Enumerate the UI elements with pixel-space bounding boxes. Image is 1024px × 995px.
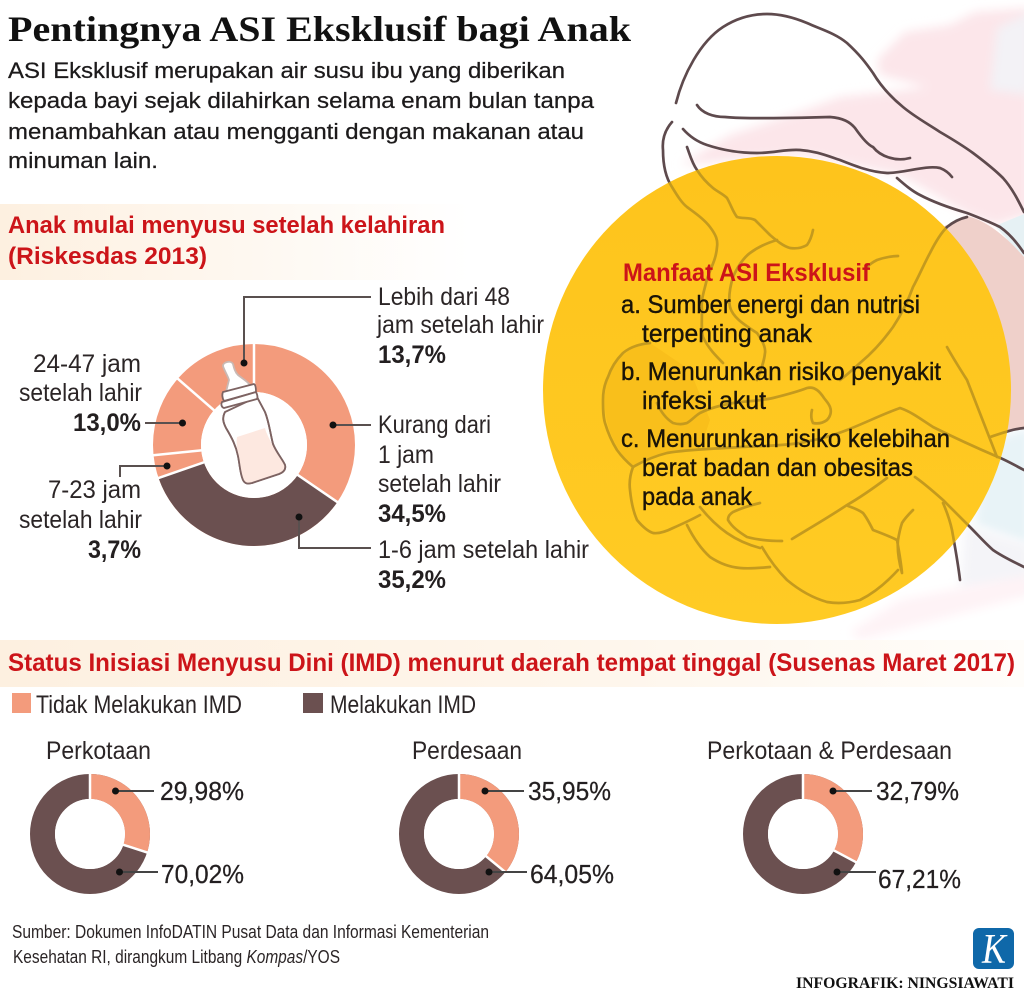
- intro paragraph: menambahkan atau mengganti dengan makanan atau: [8, 119, 584, 144]
- donut: Perkotaan: 70,02%: [161, 861, 244, 889]
- donut: Perkotaan & Perdesaan: Perkotaan & Perdesaan: [707, 737, 952, 765]
- intro paragraph: minuman lain.: [8, 148, 158, 173]
- label: 7-23 hours: [19, 476, 142, 564]
- benefit c: berat badan dan obesitas: [642, 454, 913, 482]
- mother's body tint: [940, 216, 1024, 440]
- benefit a: terpenting anak: [642, 320, 812, 348]
- label: more than 48 hours: 13,7%: [378, 341, 446, 369]
- label: less than 1 hour: setelah lahir: [378, 470, 501, 498]
- section heading: IMD status: [0, 640, 1024, 687]
- label: 24-47 hours: [19, 350, 142, 437]
- donut: Perdesaan: Perdesaan: [412, 737, 522, 765]
- source note: [12, 921, 489, 967]
- label: less than 1 hour: 34,5%: [378, 500, 446, 528]
- intro paragraph: ASI Eksklusif merupakan air susu ibu yang diberikan: [8, 58, 565, 83]
- label: 24-47 hours: 24-47 jam: [33, 350, 141, 378]
- icon: Kompas logo: K: [981, 927, 1008, 973]
- circle panel: Manfaat ASI Eksklusif: [543, 156, 1011, 624]
- label: 1-6 hours: 1-6 jam setelah lahir: [378, 536, 589, 564]
- icon: baby bottle: [221, 362, 285, 484]
- section heading: breastfeeding start: (Riskesdas 2013): [8, 243, 207, 270]
- label: more than 48 hours: [376, 283, 544, 369]
- benefit b: infeksi akut: [642, 387, 766, 415]
- section heading: breastfeeding start: [0, 204, 470, 280]
- label: 7-23 hours: setelah lahir: [19, 506, 142, 534]
- donut: Perkotaan: Perkotaan: [46, 737, 151, 765]
- benefit c: [621, 425, 950, 511]
- source note: Kesehatan RI, dirangkum Litbang Kompas/YOS: [13, 946, 340, 967]
- donut: Perkotaan: [42, 737, 244, 889]
- source note: Sumber: Dokumen InfoDATIN Pusat Data dan Informasi Kementerian: [12, 921, 489, 942]
- label: 7-23 hours: 7-23 jam: [48, 476, 141, 504]
- donut: Perkotaan & Perdesaan: 67,21%: [878, 866, 961, 894]
- benefit b: b. Menurunkan risiko penyakit: [621, 358, 941, 386]
- label: less than 1 hour: [378, 411, 501, 528]
- label: 24-47 hours: 13,0%: [73, 409, 141, 437]
- donut: Perdesaan: 64,05%: [530, 861, 614, 889]
- label: more than 48 hours: jam setelah lahir: [376, 311, 544, 339]
- label: 1-6 hours: [378, 536, 589, 594]
- label: less than 1 hour: Kurang dari: [378, 411, 491, 439]
- intro paragraph: [8, 58, 595, 173]
- main donut chart: [147, 338, 361, 552]
- benefit a: a. Sumber energi dan nutrisi: [621, 291, 920, 319]
- label: less than 1 hour: 1 jam: [378, 441, 434, 469]
- section heading: IMD status: Status Inisiasi Menyusu Dini (IMD) menurut daerah tempat tinggal (Susenas Maret 2017): [8, 649, 1015, 677]
- donut: Perkotaan: 29,98%: [160, 778, 244, 806]
- legend: Tidak Melakukan IMD: [36, 691, 242, 719]
- label: more than 48 hours: Lebih dari 48: [378, 283, 510, 311]
- credit: INFOGRAFIK: NINGSIAWATI: [796, 975, 1014, 992]
- title: Pentingnya ASI Eksklusif bagi Anak: [8, 9, 631, 49]
- benefit b: [621, 358, 941, 415]
- line art outside the circle: [603, 14, 1024, 603]
- legend: Melakukan IMD: [330, 691, 476, 719]
- label: 24-47 hours: setelah lahir: [19, 379, 142, 407]
- line art of mother and baby seen through the circle: [602, 170, 1008, 604]
- label: 1-6 hours: 35,2%: [378, 566, 446, 594]
- legend: [12, 691, 476, 719]
- donut: Perdesaan: 35,95%: [528, 778, 611, 806]
- donut: Perdesaan: [412, 737, 614, 889]
- intro paragraph: kepada bayi sejak dilahirkan selama enam bulan tanpa: [8, 88, 595, 113]
- label: 7-23 hours: 3,7%: [88, 536, 141, 564]
- donut: Perkotaan & Perdesaan: [707, 737, 961, 894]
- section heading: breastfeeding start: Anak mulai menyusu setelah kelahiran: [8, 212, 445, 239]
- benefits heading: Manfaat ASI Eksklusif: [623, 259, 871, 287]
- background watercolor wash: [680, 8, 1024, 640]
- leader lines for main donut: [120, 297, 371, 548]
- benefit a: [621, 291, 920, 348]
- icon: Kompas logo: [973, 927, 1014, 973]
- benefit c: c. Menurunkan risiko kelebihan: [621, 425, 950, 453]
- benefit c: pada anak: [642, 483, 752, 511]
- donut: Perkotaan & Perdesaan: 32,79%: [876, 778, 959, 806]
